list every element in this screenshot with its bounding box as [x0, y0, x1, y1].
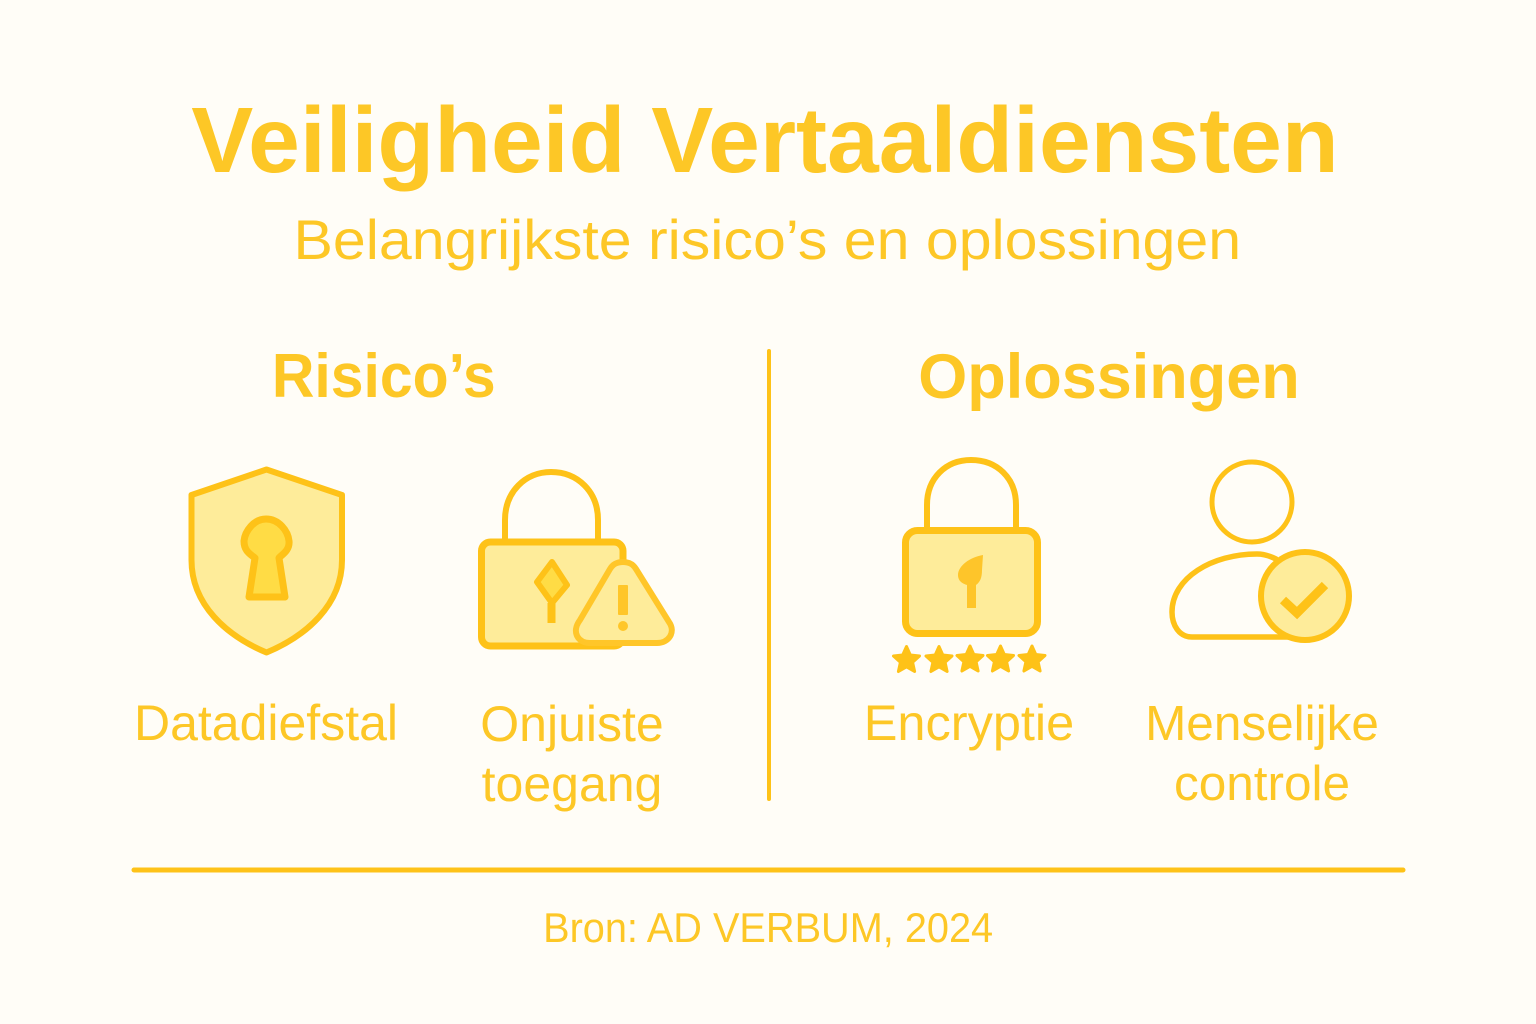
label: incorrect access: toegang	[482, 756, 662, 812]
horizontal rule	[134, 868, 1403, 872]
icon: padlock with stars	[894, 460, 1045, 672]
heading: solutions: Oplossingen	[918, 342, 1300, 412]
vertical divider	[767, 351, 771, 799]
title: Veiligheid Vertaaldiensten	[191, 88, 1339, 192]
heading: risks: Risico’s	[272, 342, 496, 411]
label: incorrect access: Onjuiste	[480, 696, 664, 752]
star rating	[894, 646, 1045, 672]
subtitle: Belangrijkste risico’s en oplossingen	[293, 208, 1241, 271]
label: incorrect access	[480, 696, 664, 812]
label: data theft: Datadiefstal	[134, 695, 398, 751]
source: Bron: AD VERBUM, 2024	[543, 904, 993, 951]
icon: shield with keyhole	[192, 470, 342, 652]
label: encryption: Encryptie	[864, 694, 1074, 751]
label: human review: controle	[1174, 756, 1350, 811]
label: human review	[1145, 696, 1379, 811]
icon: person with check badge	[1172, 462, 1349, 640]
icon: padlock with warning	[482, 472, 672, 646]
label: human review: Menselijke	[1145, 696, 1379, 751]
